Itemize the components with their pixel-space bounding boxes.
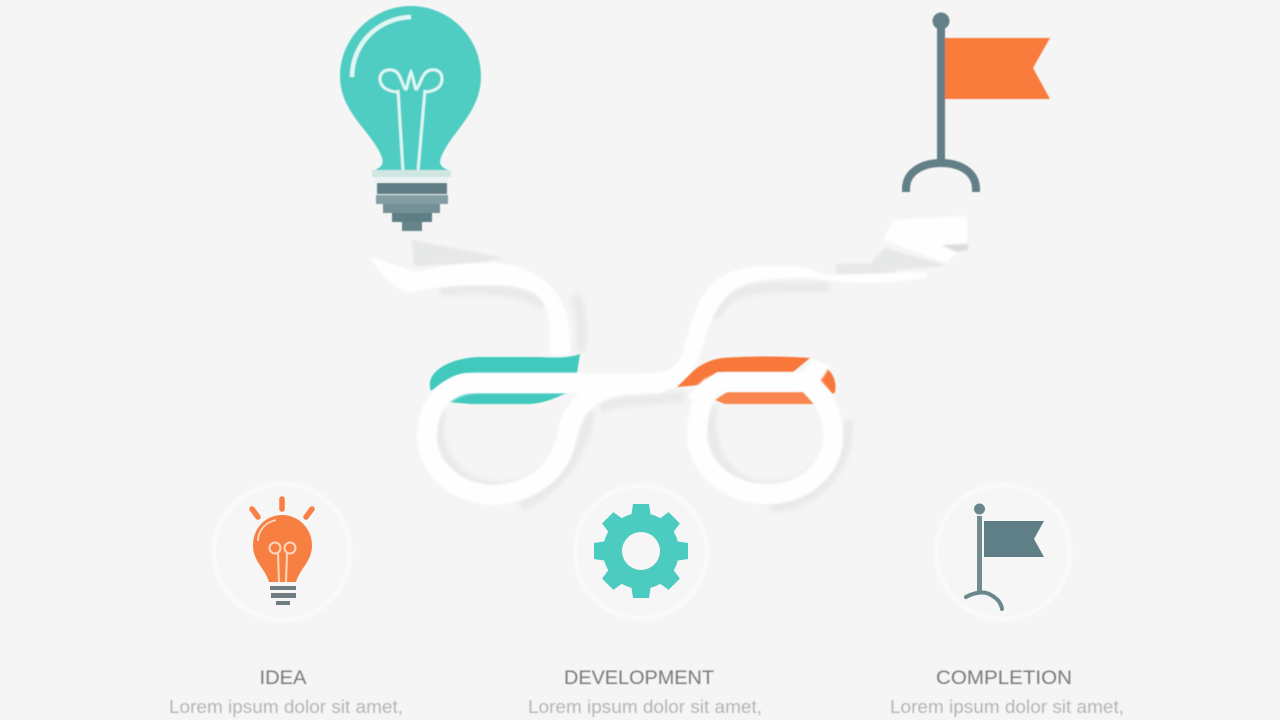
text block: development description: Lorem ipsum dolor sit amet, — [528, 697, 762, 717]
heading: completion: COMPLETION — [936, 668, 1072, 689]
white ribbon end near flag — [883, 216, 967, 263]
ribbon segment: bulb tail — [370, 257, 570, 355]
icon group: completion flag — [936, 485, 1070, 619]
orange ribbon segments — [677, 356, 835, 404]
text block: idea description: Lorem ipsum dolor sit amet, — [169, 697, 403, 717]
ribbon path shadow — [439, 287, 848, 508]
icon group: development gear — [575, 486, 707, 618]
ribbon segment: right band — [697, 362, 821, 402]
text block: completion description: Lorem ipsum dolor sit amet, — [890, 697, 1124, 717]
icon: large orange flag — [906, 12, 1050, 192]
icon group: idea — [214, 484, 350, 620]
ribbon segment: left loop — [427, 383, 640, 495]
heading: development: DEVELOPMENT — [564, 668, 714, 689]
icon: large teal light bulb — [340, 6, 481, 231]
ribbon end shadows — [412, 240, 968, 276]
ribbon segment: right loop — [697, 380, 833, 494]
white ribbon path from bulb to flag — [370, 257, 928, 495]
teal ribbon segments — [430, 354, 580, 404]
ribbon segment: rising curve to flag — [580, 265, 928, 395]
heading: idea: IDEA — [260, 668, 307, 689]
